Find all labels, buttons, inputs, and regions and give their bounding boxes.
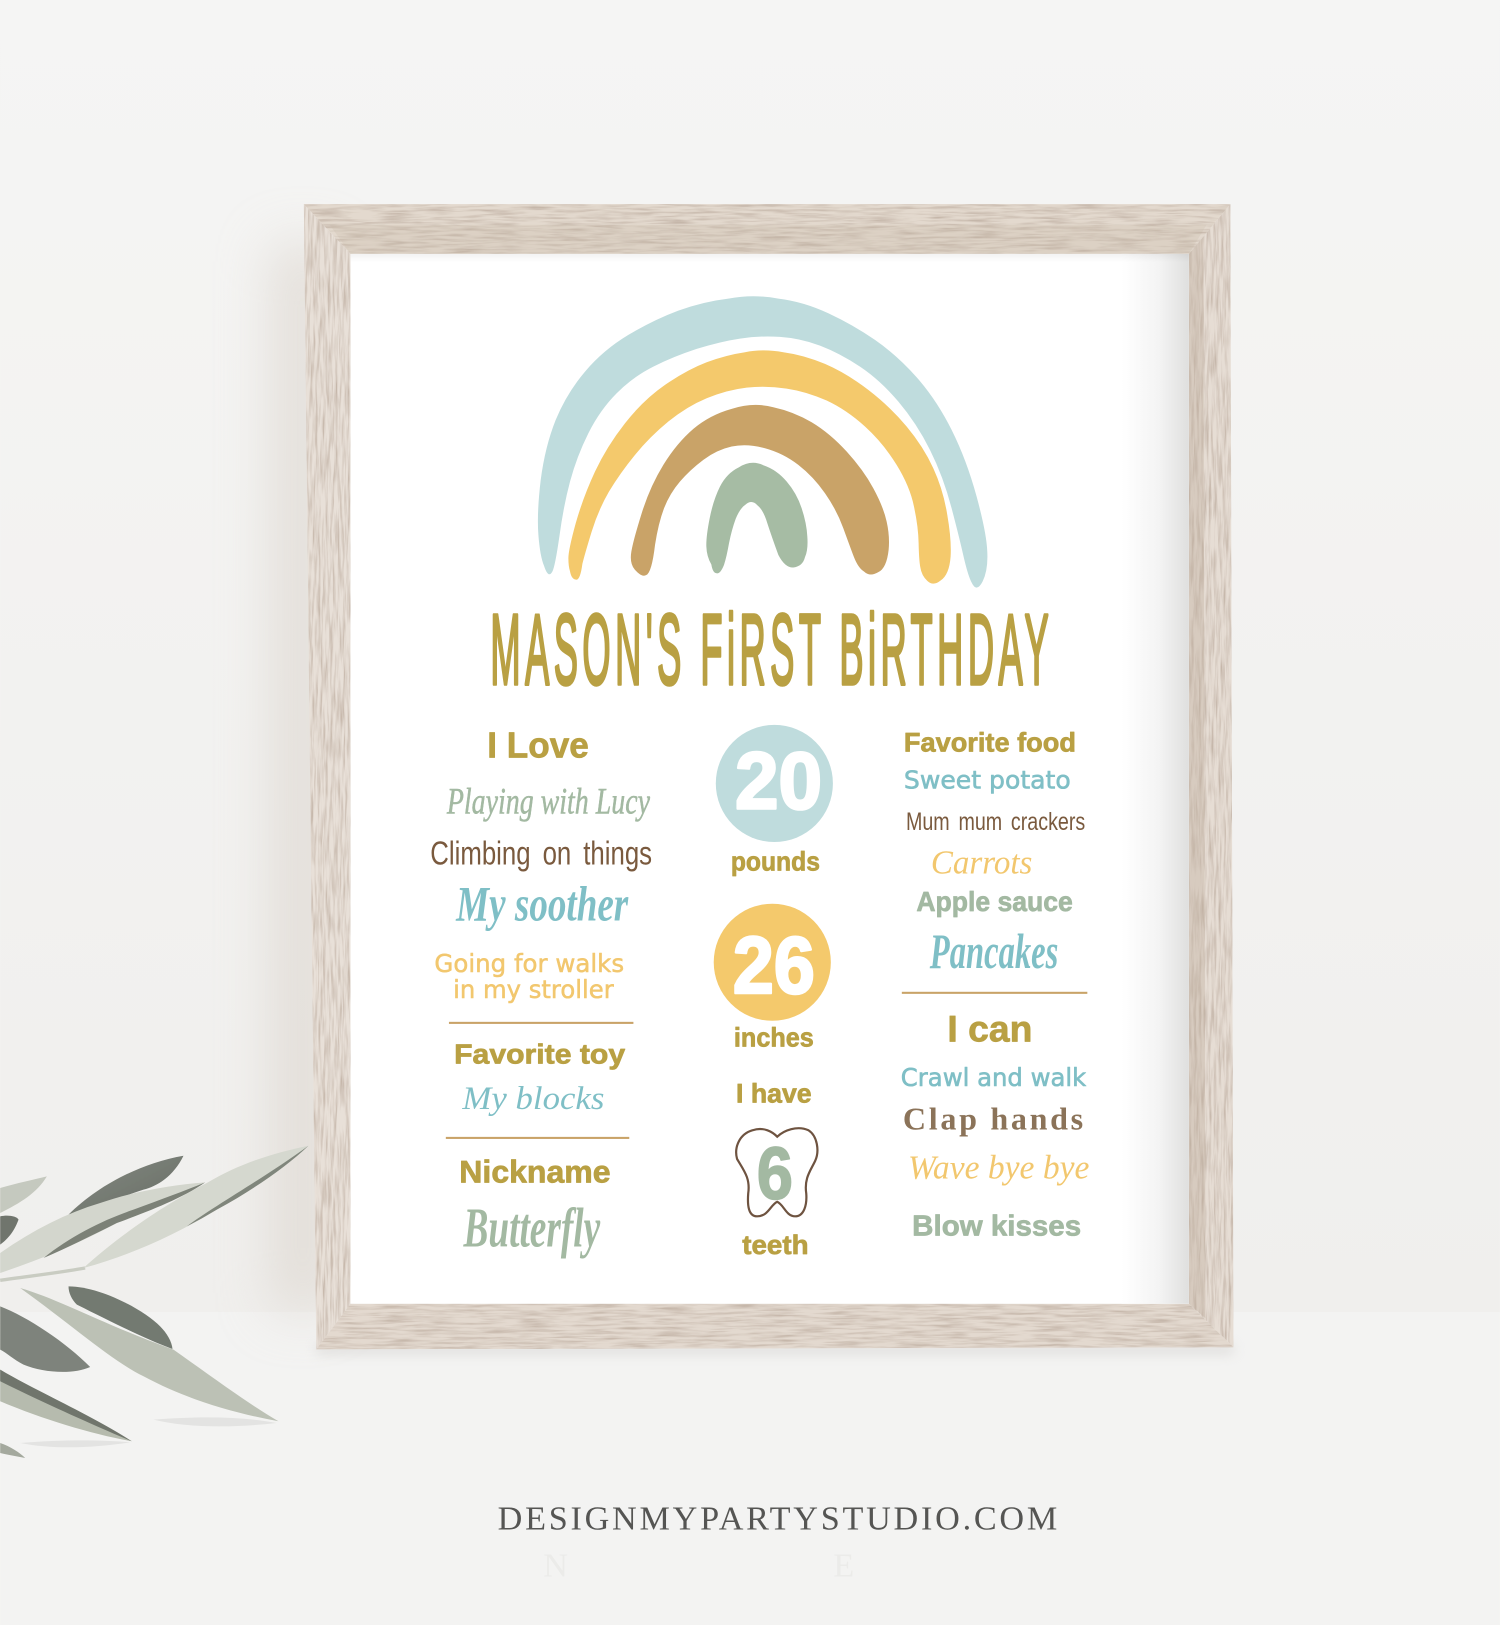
footer: ghost lettering: N (543, 1547, 568, 1584)
leaf shadows (20, 1417, 277, 1447)
frame shadow on wall (272, 244, 334, 1311)
item: Climbing on things: Climbing on things (430, 835, 652, 872)
background: shelf (0, 1312, 1500, 1625)
wooden picture frame (304, 204, 1233, 1349)
item: Sweet potato: Sweet potato (904, 766, 1071, 795)
leaf: large pale lower (20, 1288, 278, 1421)
footer: ghost lettering: E (833, 1547, 854, 1584)
frame: top inner bevel (330, 225, 1207, 254)
heading: Favorite food: Favorite food (904, 727, 1076, 757)
frame shadow on shelf (316, 1345, 1233, 1353)
label: inches: inches (734, 1023, 814, 1053)
item: Butterfly: Butterfly (463, 1198, 600, 1260)
rainbow: green arc (706, 463, 808, 573)
item: Mum mum crackers: Mum mum crackers (906, 808, 1085, 836)
heading: I Love: I Love (487, 725, 589, 766)
footer: ghost lettering (543, 1547, 854, 1584)
rainbow: brown arc (631, 405, 889, 576)
rainbow: blue arc (538, 296, 987, 588)
label: teeth: teeth (742, 1230, 809, 1260)
item: Pancakes: Pancakes (929, 924, 1058, 979)
item: Going for walks: Going for walks (434, 949, 624, 978)
rainbow: yellow arc (568, 350, 951, 584)
poster paper (350, 254, 1189, 1304)
stat circle: 26 inches (714, 904, 831, 1021)
olive branch (0, 1146, 308, 1458)
stat number: 6: 6 (757, 1131, 793, 1215)
heading: Favorite toy: Favorite toy (454, 1038, 626, 1069)
label: I have: I have (736, 1079, 812, 1109)
icon: tooth (736, 1128, 817, 1216)
panel: centre stats (714, 725, 833, 1260)
leaf: top-left (0, 1176, 47, 1213)
stat number: 26: 26 (733, 921, 815, 1011)
footer: website: DESIGNMYPARTYSTUDIO.COM (498, 1501, 1057, 1538)
leaf: far right (84, 1146, 308, 1268)
rainbow illustration (538, 296, 987, 588)
item: Blow kisses: Blow kisses (912, 1210, 1081, 1242)
frame: top side (304, 204, 1230, 254)
item: Wave bye bye: Wave bye bye (908, 1149, 1089, 1186)
item: Apple sauce: Apple sauce (916, 886, 1073, 917)
stem (0, 1268, 85, 1280)
leaf: dark left small (0, 1216, 19, 1245)
frame: right inner bevel (1189, 236, 1205, 1318)
item: Clap hands: Clap hands (903, 1101, 1083, 1137)
leaf: dark upper (69, 1156, 183, 1215)
leaf: dark left large (0, 1306, 90, 1372)
leaf: bottom (0, 1370, 132, 1441)
heading: I can: I can (947, 1008, 1032, 1050)
stat number: 20: 20 (735, 736, 822, 826)
item: My blocks: My blocks (461, 1080, 604, 1117)
item: Carrots: Carrots (931, 845, 1032, 882)
leaf: large pale upper (0, 1182, 205, 1273)
item: Crawl and walk: Crawl and walk (901, 1063, 1087, 1092)
frame: bottom side (316, 1304, 1233, 1349)
leaf: tiny bottom (0, 1443, 25, 1458)
panel: left column (430, 725, 652, 1260)
item: My soother: My soother (455, 876, 629, 931)
heading: Nickname: Nickname (459, 1154, 611, 1189)
label: pounds: pounds (731, 847, 820, 877)
frame: left side (304, 204, 350, 1349)
frame: right side (1189, 204, 1233, 1347)
item: in my stroller: in my stroller (453, 975, 614, 1004)
item: Playing with Lucy: Playing with Lucy (446, 782, 650, 823)
stat circle: 20 pounds (716, 725, 833, 842)
panel: right column (901, 727, 1089, 1242)
leaf: dark lower small (69, 1286, 172, 1349)
